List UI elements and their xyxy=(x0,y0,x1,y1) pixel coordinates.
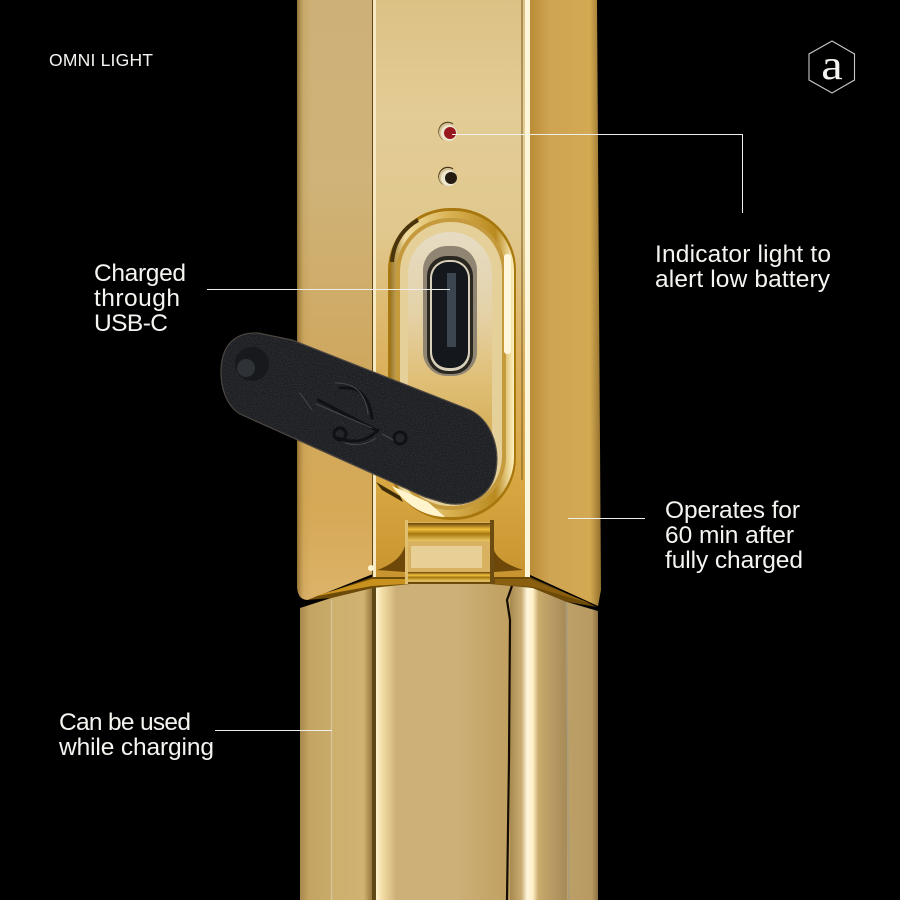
USB-C port recess xyxy=(388,208,516,520)
callout: indicator light: Indicator light to xyxy=(655,241,831,268)
label: OMNI LIGHT: OMNI LIGHT xyxy=(49,50,153,70)
callout: operates for 60 min: 60 min after xyxy=(665,522,794,549)
product: gold light body xyxy=(221,0,601,900)
second indicator dot xyxy=(439,167,457,186)
hinge joint xyxy=(307,520,597,607)
callout: can be used while charging xyxy=(58,709,332,761)
callout: indicator light xyxy=(452,134,831,293)
lower body xyxy=(300,581,598,900)
icon: USB symbol embossed on cap xyxy=(300,383,406,445)
callout: charged through USB-C: through xyxy=(94,285,180,312)
upper right panel xyxy=(528,0,601,606)
callout: charged through USB-C xyxy=(94,260,450,337)
cap tether nub xyxy=(235,347,269,381)
cap texture xyxy=(221,333,497,504)
indicator light xyxy=(439,122,457,141)
rubber USB cap xyxy=(221,333,497,504)
callout: charged through USB-C: USB-C xyxy=(94,310,168,337)
centre plate xyxy=(372,0,530,578)
logo: hexagon a: a xyxy=(821,42,843,88)
callout: can be used while charging: while charging xyxy=(58,734,214,761)
upper left panel xyxy=(297,0,373,600)
callout: can be used while charging: Can be used xyxy=(59,709,191,736)
callout: operates for 60 min: fully charged xyxy=(665,547,803,574)
callout: charged through USB-C: Charged xyxy=(94,260,186,287)
callout: operates for 60 min: Operates for xyxy=(665,497,800,524)
callout: indicator light: alert low battery xyxy=(655,266,831,293)
logo: hexagon a xyxy=(809,41,854,93)
light flare under cap xyxy=(392,486,445,517)
callout: operates for 60 min xyxy=(568,497,803,574)
